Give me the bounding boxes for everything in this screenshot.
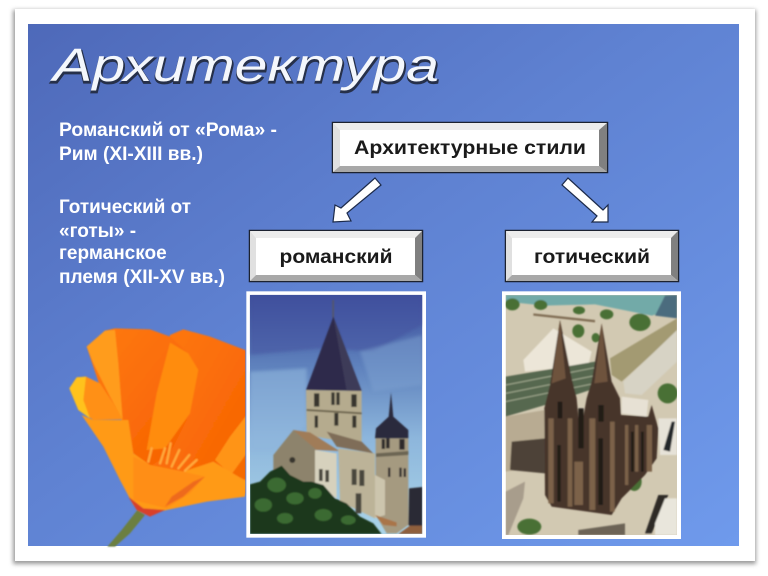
photo: Romanesque church [246,291,426,538]
tree [250,466,382,534]
photo: Gothic cathedral [502,291,681,539]
arrow: to Gothic [562,178,608,222]
text block: Gothic etymology: племя (XII-XV вв.) [59,267,225,288]
box: Gothic [506,230,678,282]
box: architectural styles [332,122,608,172]
text block: Romanesque etymology: Рим (XI-XIII вв.) [59,144,203,165]
text block: Romanesque etymology [59,120,277,165]
box: Romanesque [250,230,422,282]
box: architectural styles: Архитектурные стили [354,138,586,159]
nave [273,430,317,485]
box: Gothic: готический [534,247,650,268]
main tower spire [332,300,334,318]
text block: Romanesque etymology: Романский от «Рома» - [59,120,277,141]
title: Архитектура [50,41,440,93]
back petal [86,327,186,466]
cathedral [544,320,658,515]
back buildings [408,487,422,534]
text block: Gothic etymology: Готический от [59,197,191,218]
text block: Gothic etymology: «готы» - [59,221,136,242]
flower: orange poppy [69,328,247,547]
railway [610,318,677,382]
bell tower [376,438,408,533]
text block: Gothic etymology: германское [59,243,167,264]
front petal [82,415,247,514]
river [506,295,677,316]
left small petal [69,377,123,420]
stem [107,510,145,547]
box: Romanesque: романский [280,247,392,268]
stamens [148,443,197,471]
right petal [143,329,247,507]
green train sheds [506,362,595,417]
arrow: to Romanesque [333,178,381,222]
title: Архитектура [49,39,439,91]
text block: Gothic etymology [59,197,225,288]
main tower [306,390,362,445]
